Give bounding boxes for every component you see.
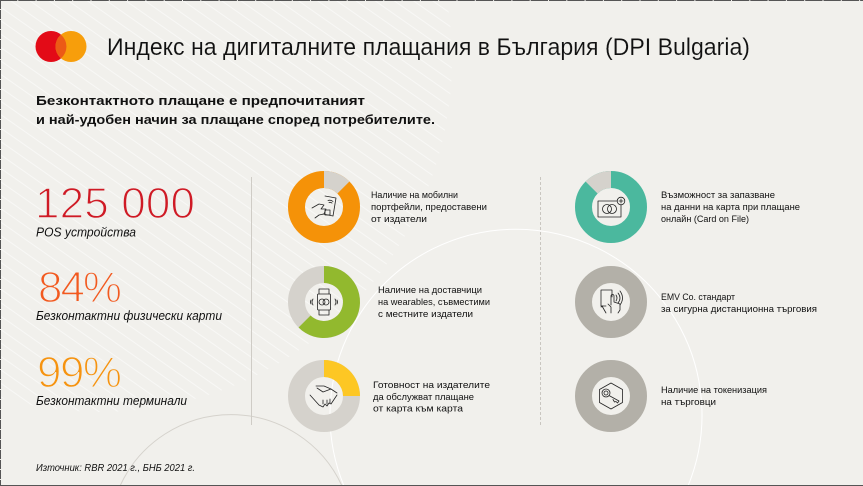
stat: contactless cards [36, 263, 222, 323]
source note: Източник: RBR 2021 г., БНБ 2021 г. [36, 462, 195, 474]
icon: Mastercard logo [36, 31, 86, 62]
donut: mobile wallets [296, 171, 352, 234]
subtitle: и най-удобен начин за плащане според потребителите. [36, 112, 435, 127]
item text: mobile wallets: от издатели [371, 214, 427, 225]
item text: EMV standard: за сигурна дистанционна търговия [661, 304, 817, 315]
stat: contactless terminals: 99% [37, 348, 122, 397]
stat: contactless terminals [36, 348, 187, 408]
item text: EMV standard [661, 292, 817, 315]
subtitle: Безконтактното плащане е предпочитаният [36, 93, 365, 108]
item text: EMV standard: EMV Co. стандарт [661, 292, 736, 303]
icon: key in hexagon [600, 383, 622, 409]
item text: card to card: да обслужват плащане [373, 392, 474, 403]
item text: card to card: Готовност на издателите [373, 380, 490, 391]
icon: phone in hand [312, 196, 336, 218]
item text: mobile wallets: Наличие на мобилни [371, 190, 458, 201]
item text: card to card: от карта към карта [373, 404, 464, 414]
item text: mobile wallets [371, 190, 487, 225]
donut: card on file [584, 171, 638, 234]
stat: contactless terminals: Безконтактни терминали [36, 393, 187, 408]
item text: wearables: на wearables, съвместими [378, 297, 490, 308]
item text: tokenization: Наличие на токенизация [661, 385, 767, 396]
title: Индекс на дигиталните плащания в България (DPI Bulgaria) [107, 34, 750, 61]
stat: POS devices: POS устройства [36, 224, 136, 240]
item text: card to card [373, 380, 490, 414]
item text: card on file: на данни на карта при плащане [661, 202, 800, 213]
icon: smartwatch [310, 289, 338, 315]
item text: mobile wallets: портфейли, предоставени [371, 202, 487, 213]
item text: tokenization: на търговци [661, 397, 716, 408]
icon: handshake [310, 386, 337, 407]
donut: wearables [296, 266, 360, 338]
item text: tokenization [661, 385, 767, 408]
item text: wearables: с местните издатели [378, 309, 473, 320]
item text: wearables [378, 285, 490, 320]
subtitle [36, 93, 435, 127]
donut: tokenization [584, 368, 638, 424]
icon: phone and touch [601, 290, 622, 313]
stat: contactless cards: 84% [38, 263, 122, 312]
donut: card to card [296, 360, 360, 424]
item text: card on file [661, 190, 800, 225]
stat: POS devices: 125 000 [35, 179, 195, 228]
donut: EMV standard [584, 274, 638, 330]
item text: card on file: Възможност за запазване [661, 190, 775, 201]
item text: wearables: Наличие на доставчици [378, 285, 482, 296]
stat: contactless cards: Безконтактни физически карти [36, 308, 222, 323]
item text: card on file: онлайн (Card on File) [661, 214, 749, 225]
icon: card with plus [598, 197, 625, 217]
